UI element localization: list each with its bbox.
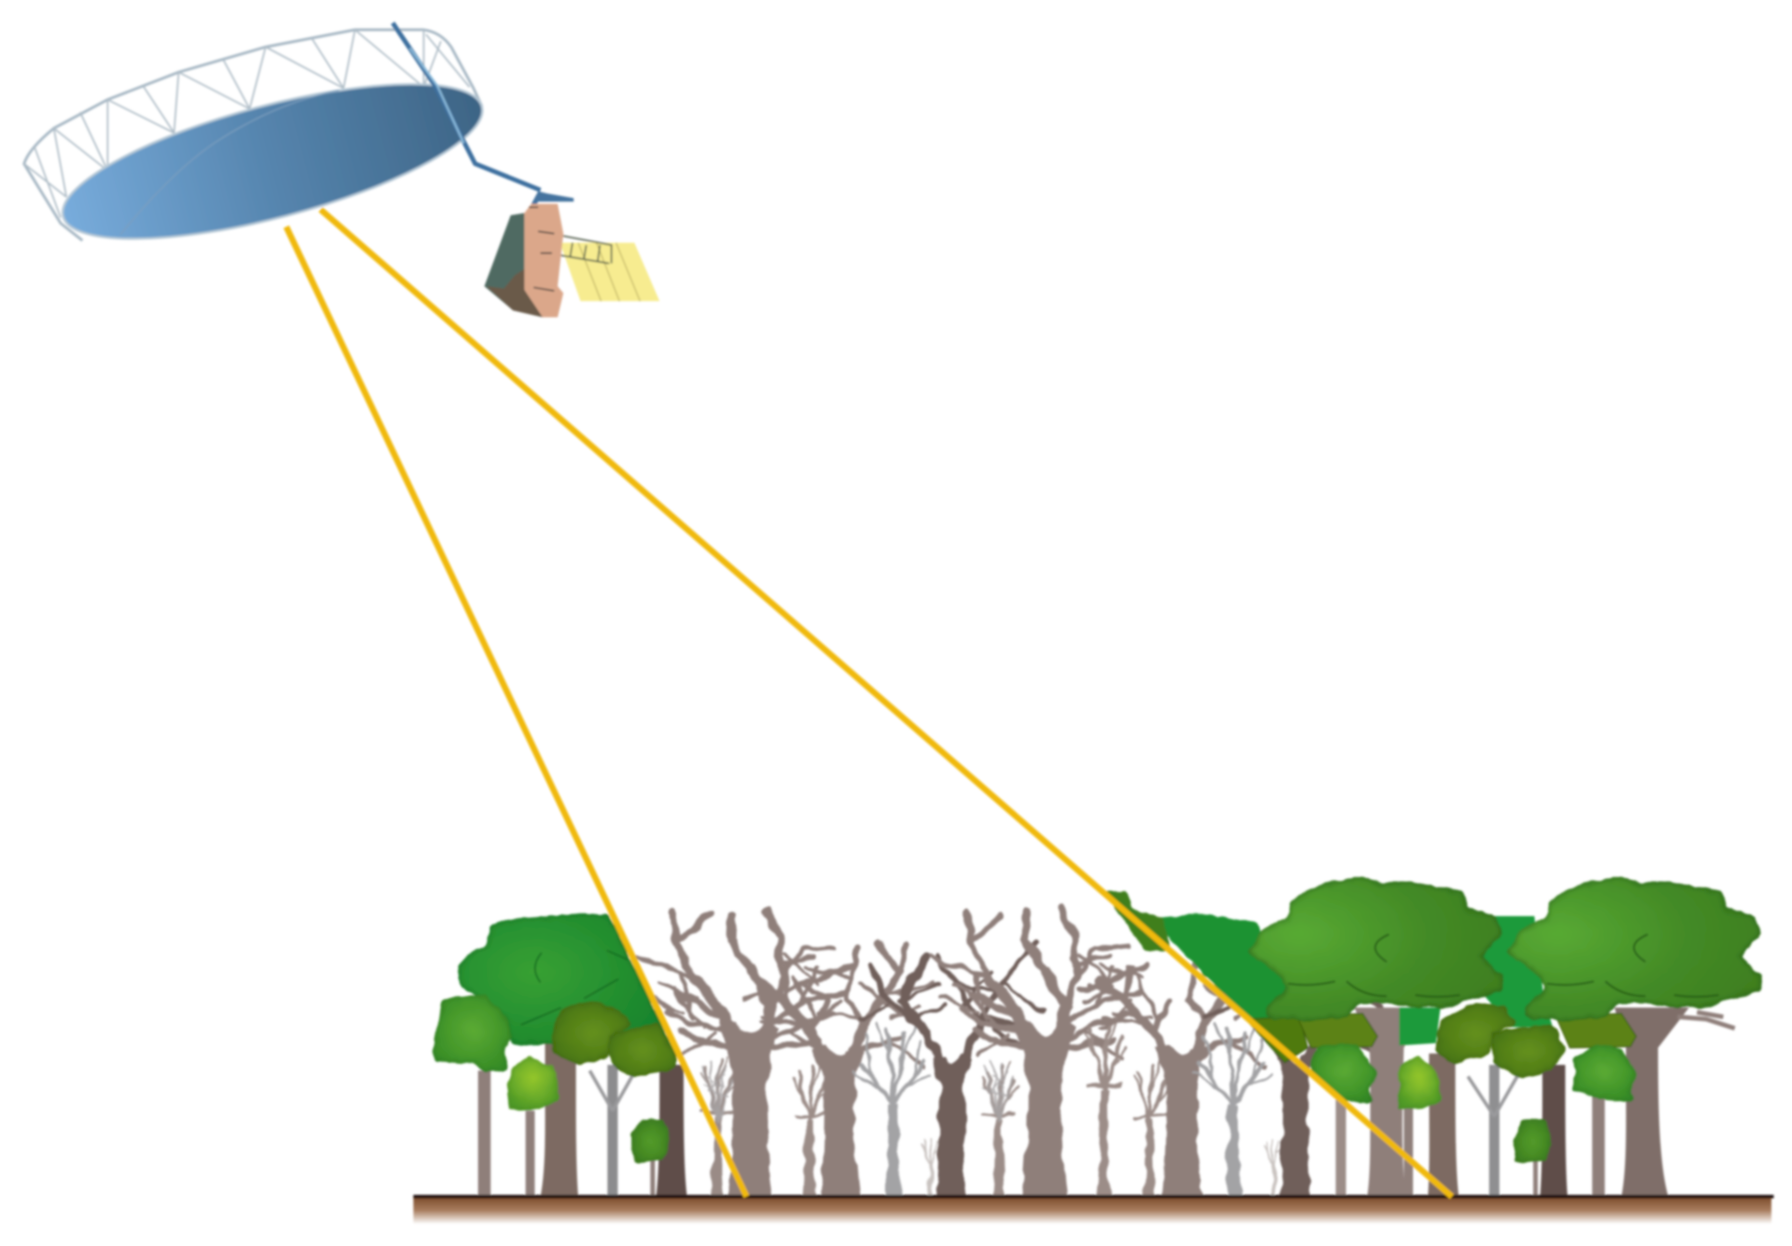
beam: right edge bbox=[321, 210, 1452, 1197]
deployment boom bbox=[393, 23, 540, 190]
crown: big right bbox=[1507, 877, 1761, 1020]
satellite bus bbox=[484, 191, 660, 317]
left forest canopy bbox=[434, 914, 678, 1163]
boom highlight bbox=[410, 48, 464, 143]
satellite antenna bbox=[24, 23, 540, 271]
crown: light green bbox=[434, 995, 512, 1073]
crown: olive back bbox=[554, 1002, 632, 1064]
bus peach face bbox=[524, 204, 563, 317]
bare trees in the beam footprint bbox=[637, 909, 1387, 1201]
crown: dark green behind bbox=[1103, 891, 1553, 1063]
bus fittings bbox=[529, 207, 554, 291]
crown: olive front bbox=[608, 1024, 678, 1076]
left forest trunks bbox=[484, 1036, 687, 1197]
ground with soil gradient bbox=[413, 1195, 1774, 1224]
crown: olive back bbox=[1436, 1003, 1516, 1064]
crown: small understory bbox=[632, 1120, 670, 1163]
under-canopy olive foliage bbox=[1297, 1013, 1636, 1048]
crown: olive front bbox=[1492, 1024, 1565, 1079]
crown: small understory bbox=[1514, 1120, 1552, 1163]
antenna ring rim bbox=[24, 30, 482, 240]
solar panel bbox=[547, 234, 660, 301]
beam: left edge bbox=[286, 227, 747, 1197]
crown: big left bbox=[1248, 877, 1502, 1020]
dish seam bbox=[120, 90, 339, 235]
crown: lime bbox=[507, 1057, 559, 1110]
crown: light green bbox=[1572, 1047, 1636, 1102]
crown: main dark green bbox=[458, 914, 678, 1059]
right forest canopy bbox=[1103, 877, 1761, 1163]
bus side panel bbox=[484, 213, 543, 317]
crown: light green clipped by beam bbox=[1311, 1044, 1377, 1102]
right forest trunks bbox=[1341, 1008, 1735, 1197]
reflector dish bbox=[49, 52, 496, 271]
top plate bbox=[531, 191, 574, 208]
crown: lime bbox=[1398, 1057, 1440, 1108]
antenna truss bbox=[24, 30, 469, 218]
radar beam edges bbox=[286, 210, 1452, 1197]
bus lower side bbox=[487, 269, 543, 317]
